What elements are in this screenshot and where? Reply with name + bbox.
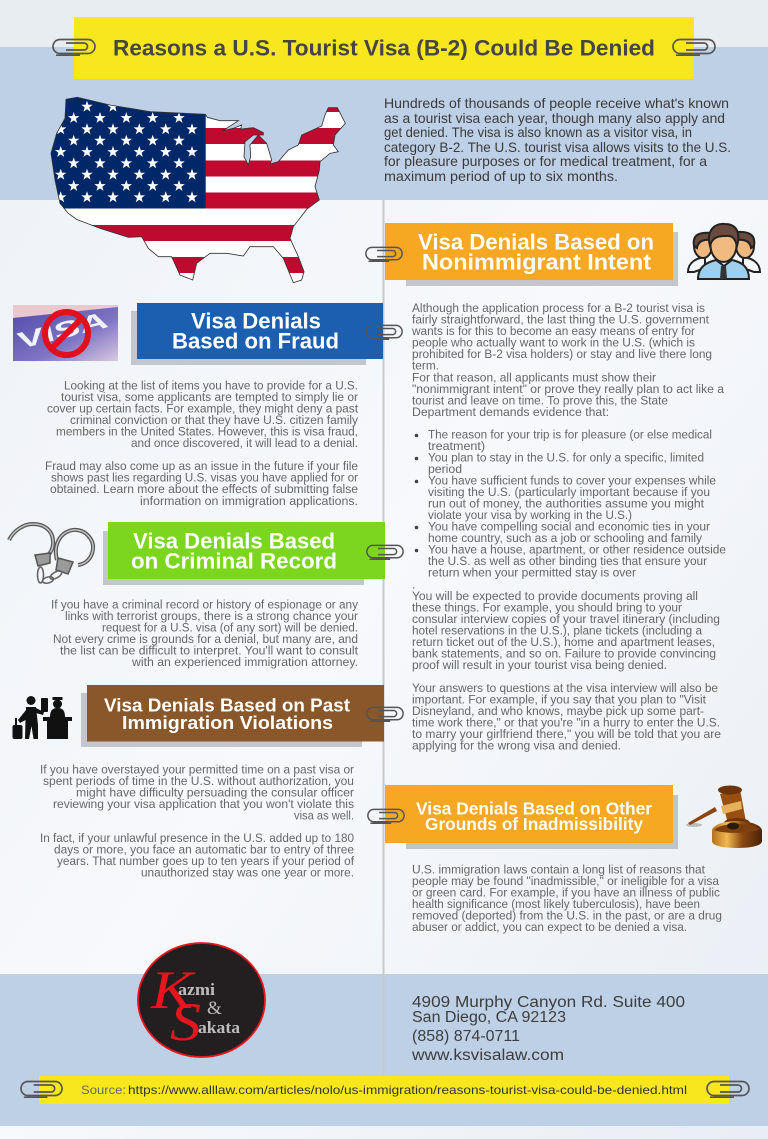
panel: fraud heading — [131, 303, 383, 365]
text block: visa interview: important. For example, if you say that you plan to "Visit — [412, 692, 707, 706]
panel: other grounds heading: Grounds of Inadmissibility — [425, 814, 643, 834]
text block: other grounds: health significance (most likely tuberculosis), have been — [412, 897, 700, 911]
paperclip: source left — [21, 1082, 62, 1097]
contact details: (858) 874-0711 — [412, 1028, 520, 1045]
top blue band — [0, 47, 768, 200]
paperclip: fraud heading — [366, 325, 402, 339]
paperclip: intent heading — [366, 247, 402, 261]
paperclip: source right — [707, 1082, 749, 1097]
panel: past violations heading — [81, 685, 384, 747]
intro text: category B-2. The U.S. tourist visa allows visits to the U.S. — [384, 139, 731, 155]
text block: past violations — [40, 762, 355, 880]
title banner — [74, 17, 694, 79]
panel: fraud heading: Based on Fraud — [172, 328, 339, 354]
intro text: Hundreds of thousands of people receive what's known — [384, 95, 729, 111]
text block: fraud: and once discovered, it will lead to a denial. — [131, 436, 358, 450]
text block: visa interview: Disneyland, and who knows, maybe pick up some part- — [412, 704, 704, 718]
text block: criminal record: request for a U.S. visa (of any sort) will be denied. — [102, 620, 358, 634]
text block: visa interview: Your answers to questions at the visa interview will also be — [412, 681, 718, 695]
logo: Kazmi & Sakata: & — [207, 998, 222, 1019]
centre divider — [382, 200, 384, 1076]
text block: documents: hotel reservations in the U.S.), plane tickets (including a — [412, 624, 702, 638]
panel: nonimmigrant intent heading — [385, 223, 678, 286]
text block: other grounds: abuser or addict, you can expect to be denied a visa. — [412, 920, 687, 934]
bullet list: evidence: the U.S. as well as other binding ties that ensure your — [428, 554, 707, 568]
text block: criminal record: If you have a criminal record or history of espionage or any — [51, 598, 359, 612]
text block: other grounds: U.S. immigration laws contain a long list of reasons that — [412, 862, 706, 876]
text block: visa interview — [412, 681, 721, 752]
panel: past violations heading: Immigration Violations — [122, 712, 333, 733]
text block: nonimmigrant intent: Department demands evidence that: — [412, 405, 609, 419]
intro text: for pleasure purposes or for medical treatment, for a — [384, 153, 707, 169]
text block: past violations: In fact, if your unlawful presence in the U.S. added up to 180 — [40, 831, 354, 845]
text block: fraud: cover up certain facts. For example, they might deny a past — [47, 402, 359, 416]
panel: nonimmigrant intent heading: Visa Denials Based on — [418, 230, 654, 254]
text block: fraud: Fraud may also come up as an issue in the future if your file — [45, 459, 358, 473]
paperclip: past violations heading — [367, 707, 403, 721]
text block: past violations: reviewing your visa application that you won't violate this — [53, 797, 354, 811]
panel: criminal record heading: Visa Denials Based — [133, 528, 335, 554]
bullet list: evidence: visiting the U.S. (particularly important because if you — [428, 485, 710, 499]
text block: past violations: unauthorized stay was one year or more. — [141, 866, 354, 880]
text block: documents — [412, 578, 720, 672]
bullet list: evidence: You plan to stay in the U.S. for only a specific, limited — [428, 450, 704, 464]
panel: other grounds heading: Visa Denials Based on Other — [416, 798, 652, 818]
contact details: San Diego, CA 92123 — [412, 1009, 566, 1026]
logo: Kazmi & Sakata: S — [170, 992, 201, 1052]
icon: gavel — [686, 786, 762, 848]
text block: criminal record: with an experienced immigration attorney. — [131, 655, 358, 669]
text block: fraud — [45, 378, 359, 508]
text block: nonimmigrant intent: people who actually want to work in the U.S. (which is — [412, 336, 695, 350]
text block: fraud: criminal conviction or that they have U.S. citizen family — [70, 413, 359, 427]
panel: criminal record heading: on Criminal Record — [131, 548, 337, 574]
text block: criminal record: the list can be difficult to interpret. You'll want to consult — [60, 644, 359, 658]
bullet list: evidence: You have a house, apartment, or other residence outside — [428, 542, 726, 556]
text block: documents: consular interview copies of your travel itinerary (including — [412, 612, 720, 626]
text block: documents: proof will result in your tourist visa being denied. — [412, 658, 667, 672]
text block: documents: You will be expected to provide documents proving all — [412, 589, 698, 603]
source bar: https://www.alllaw.com/articles/nolo/us-immigration/reasons-tourist-visa-could-be-denied.html — [128, 1083, 687, 1097]
text block: other grounds — [412, 862, 722, 934]
text block: fraud: tourist visa, some applicants are tempted to simply lie or — [61, 390, 358, 404]
text block: nonimmigrant intent: wants is for this to become an easy means of entry for — [411, 324, 695, 338]
text block: fraud: Looking at the list of items you have to provide for a U.S. — [64, 378, 358, 392]
bullet list: evidence: You have compelling social and economic ties in your — [428, 520, 710, 534]
text block: other grounds: or green card. For example, if you have an illness of public — [412, 886, 720, 900]
contact details: 4909 Murphy Canyon Rd. Suite 400 — [412, 994, 685, 1011]
text block: visa interview: to marry your girlfriend there," you will be told that you are — [412, 727, 721, 741]
title: Reasons a U.S. Tourist Visa (B-2) Could Be Denied — [113, 36, 655, 60]
bullet list: evidence: violate your visa by working in the U.S.) — [428, 508, 632, 522]
text block: visa interview: time work there," or that you're "in a hurry to enter the U.S. — [412, 716, 720, 730]
US flag map — [50, 96, 346, 284]
intro text — [384, 95, 731, 184]
panel: other grounds heading — [385, 785, 678, 849]
paperclip: title left — [53, 40, 95, 55]
text block: criminal record: links with terrorist groups, there is a strong chance your — [65, 609, 358, 623]
paperclip: other grounds heading — [368, 809, 404, 823]
text block: nonimmigrant intent: For that reason, all applicants must show their — [412, 370, 656, 384]
bullet list: evidence: home country, such as a job or schooling and family — [428, 531, 703, 545]
bullet list: evidence: period — [428, 462, 462, 476]
source bar — [39, 1076, 729, 1104]
text block: nonimmigrant intent: prohibited for B-2 visa holders) or stay and live there long — [412, 347, 712, 361]
text block: other grounds: removed (deported) from the U.S. in the past, or are a drug — [412, 908, 722, 922]
logo: Kazmi & Sakata: azmi — [178, 980, 215, 999]
text block: nonimmigrant intent: Although the application process for a B-2 tourist visa is — [412, 301, 705, 315]
text block: past violations: visa as well. — [294, 808, 354, 822]
panel: past violations heading: Visa Denials Based on Past — [104, 694, 350, 716]
text block: criminal record: Not every crime is grounds for a denial, but many are, and — [53, 632, 358, 646]
icon: passport control — [12, 696, 72, 739]
text block: visa interview: applying for the wrong visa and denied. — [412, 738, 621, 752]
top strip — [0, 0, 768, 47]
panel: nonimmigrant intent heading: Nonimmigrant Intent — [422, 250, 652, 274]
contact details — [411, 994, 685, 1064]
text block: fraud: shows past lies regarding U.S. visas you have applied for or — [51, 470, 358, 484]
contact details: www.ksvisalaw.com — [411, 1047, 564, 1064]
logo: Kazmi & Sakata: K — [150, 960, 196, 1020]
bottom blue band — [0, 974, 768, 1126]
text block: past violations: days or more, you face an automatic bar to entry of three — [54, 842, 354, 856]
text block: documents: bank statements, and so on. Failure to provide convincing — [412, 646, 716, 660]
bullet list: evidence: You have sufficient funds to cover your expenses while — [428, 474, 716, 488]
icon: handcuffs — [9, 524, 93, 584]
bullet list: evidence: The reason for your trip is for pleasure (or else medical — [428, 428, 712, 442]
icon: three people — [688, 224, 760, 279]
text block: nonimmigrant intent: fairly straightforward, the last thing the U.S. government — [412, 312, 710, 326]
text block: past violations: spent periods of time in the U.S. without authorization, you — [43, 774, 354, 788]
text block: other grounds: people may be found "inadmissible," or ineligible for a visa — [412, 874, 719, 888]
icon: visa stamp with no sign — [13, 305, 118, 361]
logo: Kazmi & Sakata: akata — [198, 1018, 241, 1037]
source bar: Source: — [81, 1083, 126, 1097]
text block: criminal record — [51, 598, 359, 669]
paperclip: title right — [673, 40, 715, 55]
text block: fraud: members in the United States. However, this is visa fraud, — [56, 424, 358, 438]
text block: nonimmigrant intent: "nonimmigrant intent" or prove they really plan to act like a — [412, 382, 724, 396]
icon: visa stamp with no sign: VISA — [15, 306, 110, 354]
text block: past violations: If you have overstayed your permitted time on a past visa or — [40, 762, 354, 776]
text block: fraud: obtained. Learn more about the effects of submitting false — [50, 482, 358, 496]
bullet list: evidence: run out of money, the authorities assume you might — [428, 496, 705, 510]
paperclip: criminal heading — [367, 545, 403, 559]
text block: documents: these things. For example, you should bring to your — [412, 600, 682, 614]
intro text: as a tourist visa each year, though many also apply and — [384, 110, 725, 126]
text block: past violations: years. That number goes up to ten years if your period of — [57, 854, 355, 868]
logo: Kazmi & Sakata — [138, 943, 265, 1057]
text block: nonimmigrant intent: term. — [412, 358, 439, 372]
text block: documents: return ticket out of the U.S.), home and apartment leases, — [412, 635, 715, 649]
text block: documents: . — [412, 578, 415, 592]
panel: fraud heading: Visa Denials — [191, 308, 321, 334]
text block: past violations: might have difficulty persuading the consular officer — [76, 786, 354, 800]
bullet list: evidence — [415, 428, 726, 580]
panel: criminal record heading — [103, 522, 385, 585]
intro text: get denied. The visa is also known as a visitor visa, in — [384, 124, 692, 140]
text block: nonimmigrant intent — [411, 301, 724, 419]
intro text: maximum period of up to six months. — [384, 168, 618, 184]
bullet list: evidence: return when your permitted stay is over — [428, 566, 636, 580]
bullet list: evidence: treatment) — [428, 439, 485, 453]
text block: nonimmigrant intent: tourist and leave on time. To prove this, the State — [412, 394, 668, 408]
text block: fraud: information on immigration applications. — [140, 494, 358, 508]
